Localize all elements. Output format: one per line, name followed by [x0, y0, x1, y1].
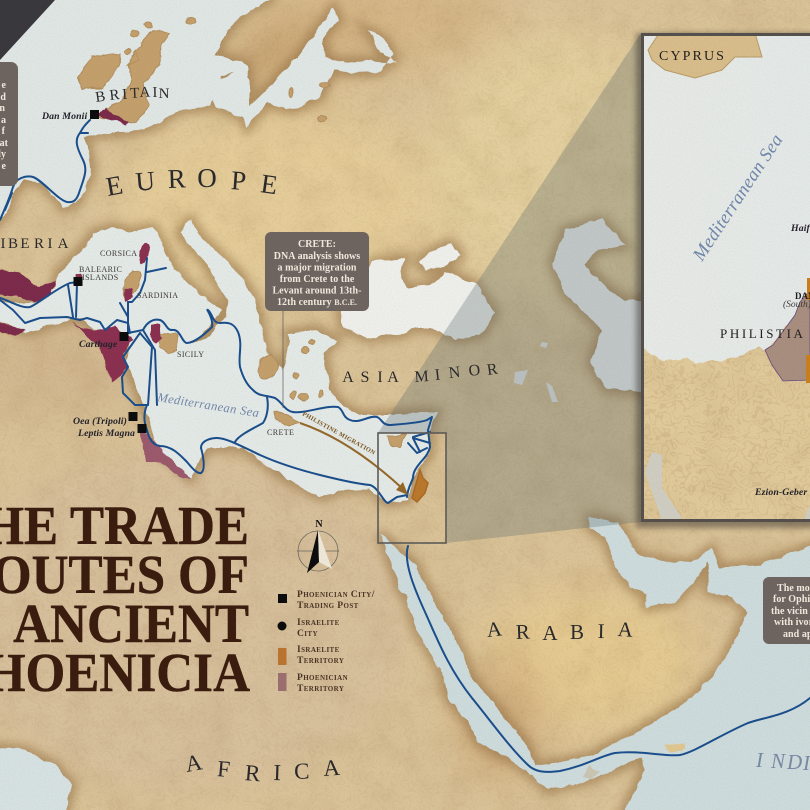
inland lakes: [514, 342, 558, 402]
callout: left: d: [0, 92, 6, 103]
callout: Crete: a major migration: [278, 262, 357, 274]
region labels: AFRICA: [183, 749, 341, 786]
place labels: BALEARIC: [79, 265, 122, 274]
callout: right: The mo: [777, 583, 810, 594]
Israelite territory: [806, 355, 810, 383]
callout: Crete: CRETE:: [298, 239, 336, 250]
callout: right: for Ophi: [773, 594, 810, 605]
legend: Israelite: [297, 618, 340, 628]
callout: right: the vicin: [771, 606, 808, 617]
legend: Phoenician: [297, 673, 348, 683]
inset map shadow: [636, 33, 810, 528]
callout: left: f: [2, 126, 6, 137]
region labels: Mediterranean Sea: [156, 390, 260, 420]
inset labels: CYPRUS: [659, 49, 726, 64]
place labels: ISLANDS: [82, 273, 119, 282]
inset map of the Levant: Ezion-Geber: [754, 487, 807, 498]
place labels: Dan Monii: [41, 111, 87, 122]
legend: City: [297, 629, 318, 639]
place labels: SARDINIA: [137, 291, 178, 300]
Cyprus: [648, 33, 762, 78]
Gulf of Suez: [645, 452, 682, 521]
callout: Crete: [265, 232, 369, 311]
callout: Crete: from Crete to the: [280, 274, 355, 285]
callout: left: [0, 62, 18, 186]
place labels: Leptis Magna: [77, 428, 135, 439]
region labels: INDI: [755, 748, 810, 775]
city markers: [74, 110, 146, 433]
Philistia territory: [765, 290, 810, 381]
callout: Crete: 12th century B.C.E.: [277, 297, 357, 308]
dark corner at top left: [0, 0, 55, 60]
legend: Israelite: [297, 645, 340, 655]
Philistine migration arrow: [300, 411, 408, 495]
place labels: SICILY: [177, 350, 204, 359]
region labels: EUROPE: [104, 163, 279, 202]
region labels: ARABIA: [485, 616, 634, 645]
callout: Crete: Levant around 13th-: [272, 286, 362, 296]
inset map of the Levant: Mediterranean Sea: [689, 131, 788, 266]
legend: Trading Post: [297, 601, 359, 611]
Israelite territory on main map: [412, 470, 428, 502]
title: ANCIENT: [13, 594, 249, 654]
Philistine migration arrow: PHILISTINE MIGRATION: [301, 411, 377, 457]
inset border: [642, 34, 810, 520]
detail box around the Levant: [378, 433, 446, 543]
place labels: CORSICA: [100, 249, 137, 258]
islands: [77, 17, 407, 447]
legend: Territory: [297, 684, 344, 694]
callout: Crete: DNA analysis shows: [274, 251, 360, 262]
place labels: Oea (Tripoli): [73, 416, 127, 427]
inset sea: [644, 36, 810, 364]
region labels: ASIA MINOR: [342, 361, 499, 386]
callout: left: e: [2, 80, 6, 91]
Crete callout leader line: [282, 311, 284, 408]
place labels: [41, 111, 294, 439]
region labels: BRITAIN: [94, 85, 170, 106]
callout: right: [763, 577, 810, 644]
Phoenician territories: [0, 107, 190, 478]
place labels: CRETE: [267, 428, 294, 437]
title: [0, 496, 250, 703]
compass: N: [315, 519, 323, 530]
place labels: Carthage: [79, 339, 118, 350]
region labels: IBERIA: [0, 236, 69, 252]
compass: [297, 519, 339, 573]
legend: Phoenician City/: [297, 590, 375, 600]
legend: [278, 590, 375, 694]
inset map of the Levant: [641, 33, 810, 522]
inset map of the Levant: PHILISTIA: [720, 326, 806, 341]
callout: left: e: [2, 161, 6, 172]
callout: left: a: [1, 115, 6, 126]
legend: Territory: [297, 656, 344, 666]
zoom wedge connecting the detail box to the inset: [378, 33, 641, 543]
